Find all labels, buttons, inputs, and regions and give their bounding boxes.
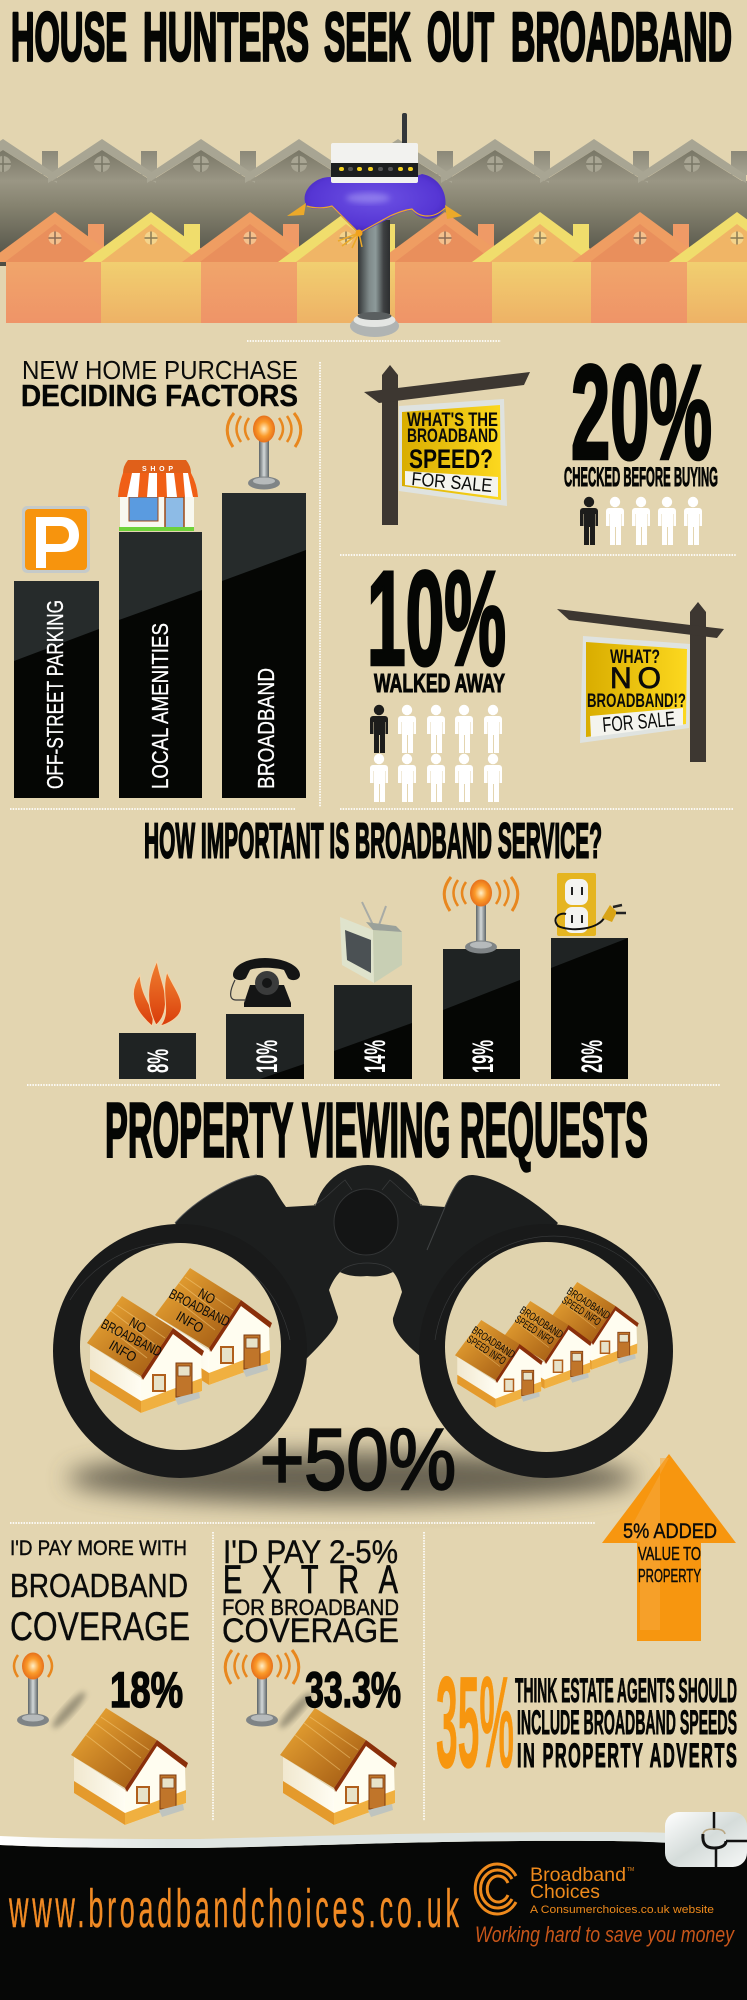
lens: right, houses with broadband speed info: BROADBAND — [517, 1304, 565, 1341]
panel: deciding factors bar chart — [14, 413, 306, 798]
bar: 19%: 19% — [467, 1040, 500, 1073]
text: estate agents statement — [515, 1672, 737, 1775]
heading: I'd pay more with broadband coverage: BROADBAND — [10, 1567, 188, 1604]
lens: right, houses with broadband speed info: BROADBAND — [564, 1285, 612, 1322]
icon: television — [340, 902, 402, 983]
heading: I'd pay 2-5% extra for broadband coverage — [222, 1534, 399, 1650]
dividers — [10, 808, 734, 810]
lens: right, houses with broadband speed info: SPEED INFO — [464, 1333, 508, 1368]
icon: parking sign — [22, 506, 90, 573]
icon: power outlet and plug — [555, 873, 626, 936]
heading: I'd pay 2-5% extra for broadband coverage: COVERAGE — [222, 1612, 399, 1650]
divider — [340, 554, 736, 556]
logo: broadband choices: TM — [627, 1867, 634, 1873]
icon: binoculars — [53, 1165, 673, 1478]
bar: broadband: BROADBAND — [253, 668, 279, 789]
icon: flame — [133, 961, 181, 1026]
heading: I'd pay more with broadband coverage: COVERAGE — [10, 1605, 190, 1649]
divider — [27, 1084, 720, 1086]
lens: right, houses with broadband speed info: SPEED INFO — [559, 1294, 603, 1329]
caption: walked away: WALKED AWAY — [374, 668, 505, 698]
heading: new home purchase deciding factors — [21, 355, 298, 413]
bar: 8%: 8% — [142, 1049, 175, 1073]
icon: telephone — [231, 958, 300, 1007]
bar: 20%: 20% — [576, 1040, 609, 1073]
icon: for sale sign speed: SPEED? — [409, 444, 493, 474]
heading: I'd pay 2-5% extra for broadband coverage: I'D PAY 2-5% — [223, 1534, 398, 1570]
pictogram: 1 in 10 people — [370, 705, 502, 802]
bar: off-street parking: OFF-STREET PARKING — [42, 600, 68, 789]
stat: +50%: +50% — [260, 1412, 456, 1508]
title: HUNTERS — [143, 0, 309, 76]
divider under hero — [247, 340, 501, 342]
title: HOUSE — [11, 0, 127, 76]
panel: 35% think estate agents should include speeds: 35% — [436, 1649, 514, 1795]
icon: house — [71, 1708, 188, 1825]
icon: broadband antenna — [227, 413, 301, 490]
lens: left, houses without broadband info: NO — [196, 1285, 218, 1307]
arrow: 5% added value to property — [602, 1454, 736, 1641]
lens: left, houses without broadband info: BROADBAND — [99, 1315, 165, 1360]
title: SEEK — [324, 0, 411, 76]
title: OUT — [427, 0, 494, 76]
icon: for sale sign no broadband: NO — [610, 662, 661, 695]
text: estate agents statement: IN PROPERTY ADVERTS — [517, 1736, 737, 1775]
bar: 14%: 14% — [359, 1040, 392, 1073]
stat: 18%: 18% — [110, 1662, 183, 1718]
lens: left, houses without broadband info: INFO — [174, 1308, 207, 1336]
logo: broadband choices: Broadband — [530, 1865, 626, 1886]
stat: 33.3%: 33.3% — [305, 1662, 401, 1718]
icon: house — [280, 1708, 397, 1825]
heading: new home purchase deciding factors: DECIDING FACTORS — [21, 378, 298, 413]
title — [11, 0, 732, 76]
icon: for sale sign no broadband: FOR SALE — [601, 708, 676, 737]
icon: C rings — [475, 1864, 516, 1914]
heading: I'd pay more with broadband coverage — [10, 1537, 190, 1649]
icon: shop: SHOP — [142, 466, 173, 473]
icon: for sale sign no broadband — [557, 602, 724, 762]
icon: for sale sign no broadband: WHAT? — [610, 647, 660, 668]
icon: plug tile — [665, 1812, 747, 1867]
icon: antenna — [225, 1650, 316, 1731]
heading: I'd pay more with broadband coverage: I'D PAY MORE WITH — [10, 1537, 187, 1560]
footer band — [0, 1832, 747, 2000]
bar: local amenities — [119, 532, 202, 798]
heading: I'd pay 2-5% extra for broadband coverage: FOR BROADBAND — [222, 1595, 399, 1620]
panel: pay more with broadband coverage 18% — [10, 1537, 190, 1825]
icon: for sale sign speed — [364, 365, 530, 525]
orange and yellow front row of houses — [0, 212, 747, 323]
footer url: www.broadbandchoices.co.uk — [8, 1879, 459, 1940]
icon: antenna small — [14, 1652, 89, 1731]
lens: right, houses with broadband speed info — [445, 1242, 648, 1452]
street of houses illustration — [0, 139, 747, 323]
pictogram: 1 in 5 people — [580, 497, 702, 545]
bar: 10%: 10% — [251, 1040, 284, 1073]
logo: broadband choices: Choices — [530, 1882, 600, 1903]
divider vertical — [319, 362, 321, 807]
panel: 20 percent checked before buying — [364, 338, 718, 545]
lens: left, houses without broadband info: BROADBAND — [167, 1285, 233, 1330]
heading: I'd pay 2-5% extra for broadband coverage: EXTRA — [223, 1557, 399, 1602]
panel: pay 2-5% extra 33.3% — [222, 1534, 401, 1825]
logo: broadband choices — [475, 1864, 714, 1916]
arrow: 5% added value to property: PROPERTY — [638, 1566, 701, 1586]
panel: broadband importance bar chart — [119, 873, 628, 1079]
icon: broadband antenna — [444, 877, 518, 954]
icon: for sale sign no broadband: BROADBAND!? — [587, 691, 686, 712]
lens: left, houses without broadband info: NO — [126, 1314, 149, 1336]
panel: 10 percent walked away — [367, 544, 724, 802]
grey back row of houses — [0, 139, 747, 266]
ground shadow — [67, 1452, 637, 1504]
bar: local amenities: LOCAL AMENITIES — [147, 623, 173, 789]
icon: for sale sign speed: BROADBAND — [407, 426, 498, 447]
bar: off-street parking — [14, 581, 99, 798]
lens: right, houses with broadband speed info: SPEED INFO — [512, 1313, 556, 1348]
bar: 10% — [226, 1014, 304, 1079]
lens: left, houses without broadband info: INFO — [106, 1337, 140, 1365]
bar: 20% — [551, 938, 628, 1079]
icon: shop — [118, 460, 198, 531]
icon: for sale sign speed: WHAT'S THE — [407, 410, 498, 431]
bar: 19% — [443, 949, 520, 1079]
bar: 14% — [334, 985, 412, 1079]
arrow: 5% added value to property: 5% ADDED — [623, 1520, 717, 1543]
icon: router on a cushion on a pillar — [287, 113, 462, 337]
logo: broadband choices: A Consumerchoices.co.uk website — [530, 1904, 714, 1916]
icon: for sale sign speed: FOR SALE — [411, 469, 493, 497]
lens: left, houses without broadband info — [80, 1243, 281, 1450]
arrow: 5% added value to property: VALUE TO — [638, 1544, 701, 1564]
bar: broadband — [222, 493, 306, 798]
stat: 10%: 10% — [367, 544, 506, 694]
dividers — [10, 1523, 595, 1821]
heading: new home purchase deciding factors: NEW HOME PURCHASE — [22, 355, 298, 385]
lens: right, houses with broadband speed info: BROADBAND — [469, 1324, 517, 1361]
bar: 8% — [119, 1033, 196, 1079]
